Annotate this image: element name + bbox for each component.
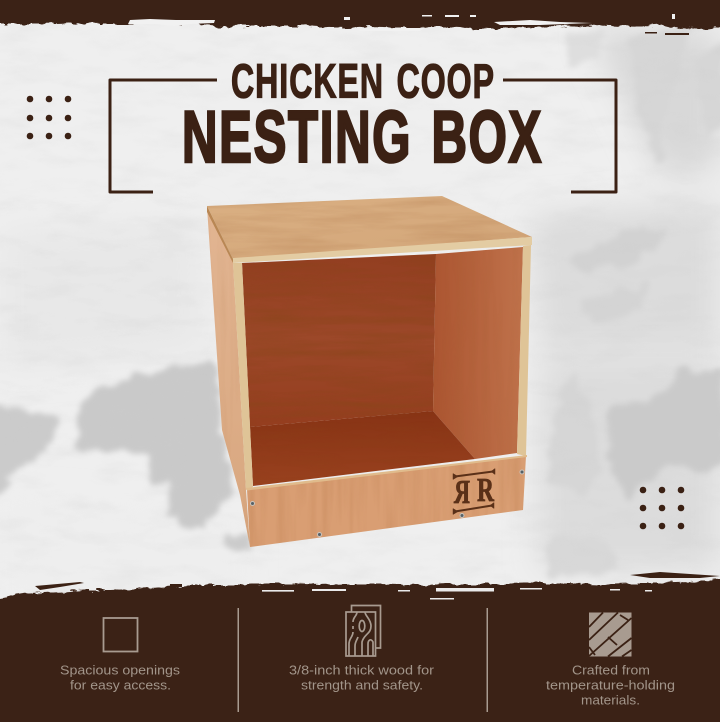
icon: wood planks — [346, 606, 380, 656]
front lip — [245, 454, 529, 549]
feature text: materials. — [581, 692, 640, 708]
title line: Chicken Coop: CHICKEN COOP — [231, 56, 495, 108]
feature: thick wood — [289, 606, 435, 692]
burned AR logo: R — [477, 472, 494, 509]
right wall — [430, 245, 526, 461]
feature text: temperature-holding — [546, 678, 675, 692]
screws — [250, 470, 524, 536]
feature: spacious openings — [60, 618, 181, 692]
decorative dots: top left — [27, 96, 71, 139]
feature text: Crafted from — [572, 662, 650, 678]
top torn brown band — [0, 0, 720, 35]
decorative dots: bottom right — [640, 487, 684, 529]
feature text — [60, 662, 181, 692]
nesting box product illustration — [205, 194, 535, 550]
feature text — [546, 662, 675, 708]
icon: herringbone material swatch — [589, 612, 632, 656]
title frame — [110, 80, 616, 192]
left plywood edge — [233, 263, 253, 490]
feature text: 3/8-inch thick wood for — [289, 662, 435, 678]
feature text: strength and safety. — [301, 678, 423, 692]
feature text: Spacious openings — [60, 662, 181, 678]
left outer side — [207, 212, 250, 546]
divider — [486, 608, 488, 712]
feature text: for easy access. — [70, 678, 171, 692]
bottom torn brown band — [0, 572, 720, 722]
title line: Nesting Box: NESTING BOX — [182, 97, 543, 178]
floor — [250, 411, 475, 486]
right plywood edge — [517, 245, 531, 456]
top panel front edge — [207, 206, 233, 263]
top panel — [207, 196, 532, 258]
front lip top edge — [246, 455, 527, 490]
feature text — [289, 662, 435, 692]
feature: temperature-holding materials — [546, 612, 675, 708]
divider — [238, 608, 239, 712]
back wall — [240, 250, 440, 432]
icon: open square — [104, 618, 138, 652]
burned AR logo — [453, 468, 495, 514]
burned AR logo: R — [454, 474, 470, 511]
